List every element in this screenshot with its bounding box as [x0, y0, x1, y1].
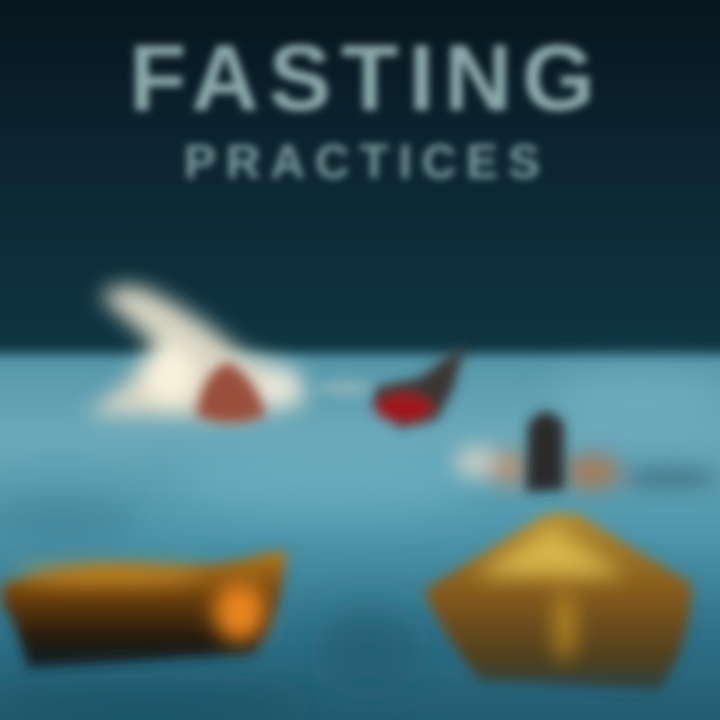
sea texture highlights — [0, 371, 720, 720]
boat: right yellow boat — [424, 514, 692, 690]
title: FASTING: FASTING — [129, 25, 595, 130]
subtitle: PRACTICES: PRACTICES — [184, 136, 540, 189]
figure: white splash with swimmer — [85, 286, 305, 423]
background: blue-teal sea — [0, 354, 720, 720]
boat: left yellow boat — [2, 550, 286, 668]
figure: dark swimmer on the right — [454, 412, 720, 492]
figure: dark sail with red hull — [317, 342, 466, 428]
